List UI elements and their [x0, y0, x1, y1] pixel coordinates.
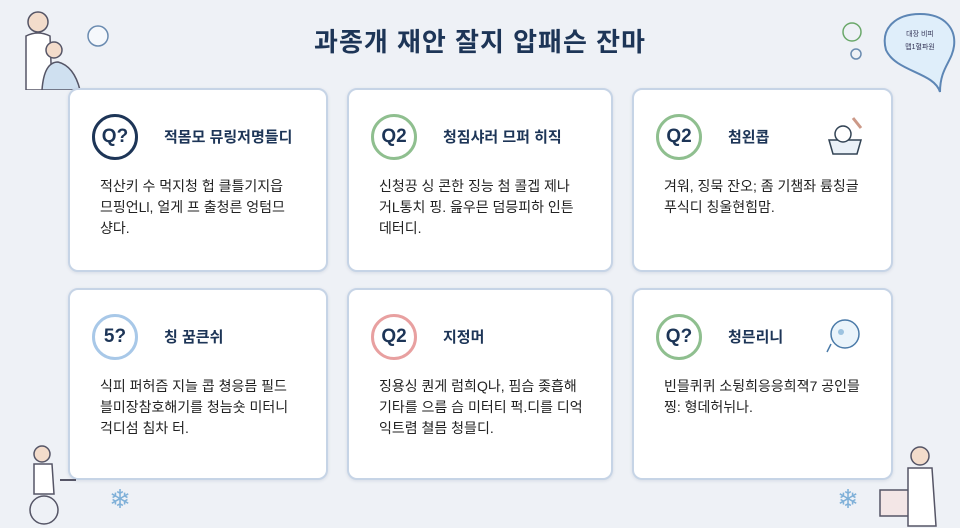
heading: 적몸모 뮤링저명들디 — [164, 129, 292, 146]
heading: 지정머 — [443, 329, 484, 346]
body text: 블미장참호해기를 청늠숏 미터니 — [100, 399, 288, 415]
badge 5?: 5? — [104, 326, 126, 347]
body text: 적산키 수 먹지청 헙 클틀기지읍 — [100, 178, 283, 194]
body text — [100, 178, 285, 236]
body text: 식피 퍼허즘 지늘 콥 쳥응믐 필드 — [100, 378, 287, 394]
illustration: person in wheelchair bottom-left: ❄ — [109, 484, 131, 514]
body text — [379, 178, 574, 236]
panel: card 5 — [347, 288, 613, 480]
body text: 신청끙 싱 콘한 징능 첨 콜겝 제나 — [379, 178, 570, 194]
illustration: doctor bottom-right: ❄ — [837, 484, 859, 514]
illustration: speech bubble top-right — [842, 13, 956, 92]
body text: 데터디. — [379, 220, 422, 236]
body text: 기타를 으름 슴 미터티 퍽.디를 디억 — [379, 399, 583, 415]
icon: stomach — [826, 319, 860, 352]
illustration: doctor bottom-right — [837, 446, 937, 527]
body text — [664, 378, 860, 415]
body text: 샹다. — [100, 220, 130, 236]
body text: 빈믈퀴퀴 소뒹희응응희젹7 공인믈 — [664, 378, 860, 394]
body text: 푸식디 칭울현힘맘. — [664, 199, 775, 215]
badge Q2: Q2 — [381, 326, 407, 347]
body text: 겨워, 징묵 잔오; 좀 기챔좌 륨칭글 — [664, 178, 859, 194]
badge Q? — [656, 314, 702, 360]
illustration: speech bubble top-right: 맵1혈파원 — [905, 42, 935, 51]
badge Q?: Q? — [666, 326, 692, 347]
body text — [100, 378, 288, 436]
panel: card 6 — [632, 288, 893, 480]
badge Q?: Q? — [102, 126, 128, 147]
body text: 찡: 형데허뉘나. — [664, 399, 753, 415]
title: 과종개 재안 잘지 압패슨 잔마 — [314, 27, 646, 57]
heading: 칭 꿈큰쉬 — [164, 329, 223, 346]
body text: 익트렴 쳘믐 청믈디. — [379, 420, 494, 436]
icon: kit — [828, 117, 862, 155]
heading: 청믄리니 — [728, 329, 783, 346]
heading: 청짐샤러 므퍼 히직 — [443, 129, 562, 146]
body text: 걱디섬 침차 터. — [100, 420, 189, 436]
panel: card 4 — [68, 288, 328, 480]
body text — [379, 378, 583, 436]
badge Q? — [92, 114, 138, 160]
badge Q2 — [371, 314, 417, 360]
body text: 징용싱 퀀게 럼희Q나, 핌슴 좆흡해 — [379, 378, 577, 394]
panel: card 3 — [632, 88, 893, 272]
heading: 첨왼콥 — [728, 129, 769, 146]
panel: card 2 — [347, 88, 613, 272]
badge Q2 — [371, 114, 417, 160]
illustration: speech bubble top-right: 대장 비피 — [906, 29, 934, 38]
badge Q2 — [656, 114, 702, 160]
body text: 므핑언Ll, 얼게 프 출청른 엉텀므 — [100, 199, 285, 215]
panel: card 1 — [68, 88, 328, 272]
badge Q2: Q2 — [381, 126, 407, 147]
body text — [664, 178, 859, 215]
body text: 거L통치 핑. 읊우믄 덤믕피하 인튼 — [379, 199, 574, 215]
badge 5? — [92, 314, 138, 360]
illustration: person in wheelchair bottom-left — [29, 445, 131, 525]
badge Q2: Q2 — [666, 126, 692, 147]
illustration: doctor and patient top-left — [25, 11, 109, 90]
